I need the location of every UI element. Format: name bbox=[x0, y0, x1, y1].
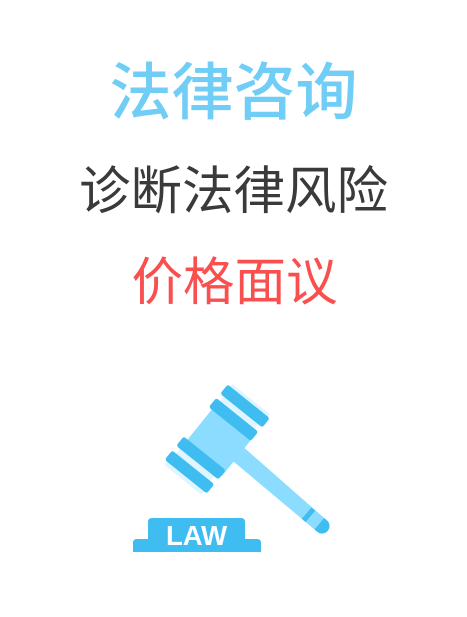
title: 法律咨询 bbox=[109, 59, 358, 128]
law label: LAW bbox=[166, 520, 227, 551]
gavel bbox=[164, 384, 333, 537]
law block bbox=[133, 518, 261, 552]
subtitle: 诊断法律风险 bbox=[79, 162, 388, 220]
gavel handle bbox=[230, 445, 333, 537]
gavel bands bbox=[165, 384, 270, 494]
pale highlights bbox=[164, 384, 270, 495]
price note: 价格面议 bbox=[131, 253, 338, 311]
gavel head body bbox=[184, 408, 251, 476]
